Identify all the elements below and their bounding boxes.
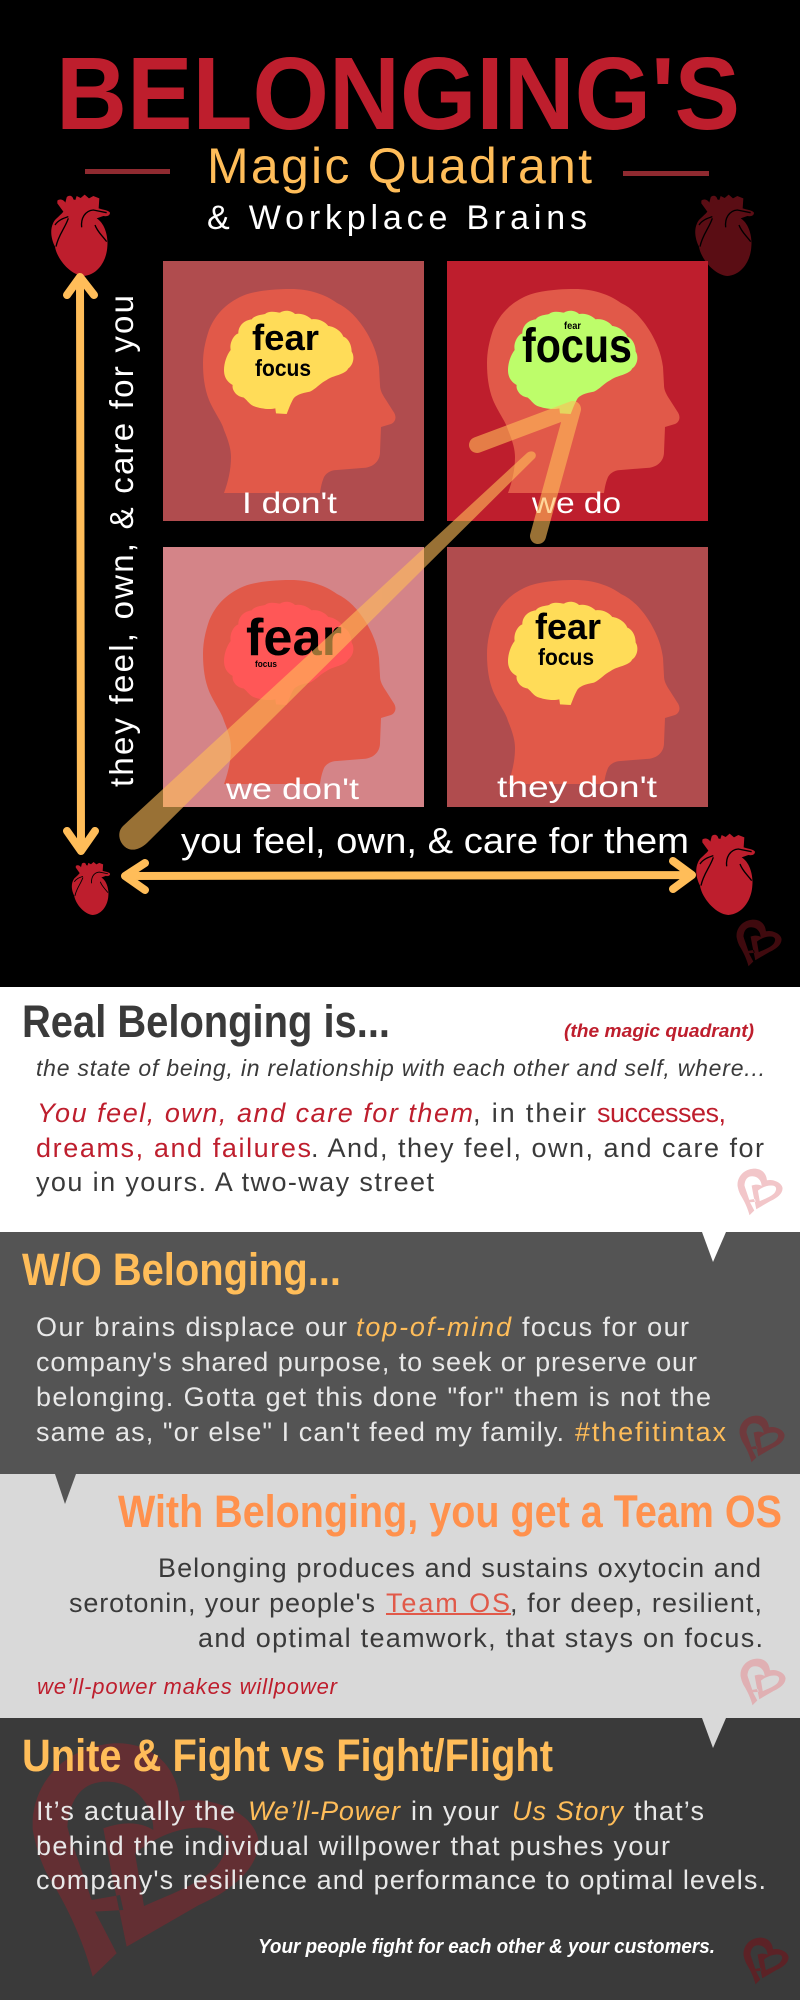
- panel: we do quadrant: [447, 261, 708, 521]
- panel: W/O Belonging: [0, 1232, 800, 1474]
- panel: we don't quadrant: [163, 547, 424, 807]
- body text: . And, they feel, own, and care for: [311, 1133, 764, 1163]
- pointer: [702, 1232, 726, 1262]
- closing line: Your people fight for each other & your customers.: [258, 1936, 715, 1958]
- body text: Us Story: [512, 1796, 624, 1826]
- icon: heart top right dark: [695, 195, 754, 276]
- panel: I don't quadrant: fear: [252, 317, 319, 358]
- arrow: horizontal axis: [125, 861, 692, 890]
- icon: logo: [740, 1416, 785, 1462]
- body text: company's shared purpose, to seek or preserve our: [36, 1347, 697, 1377]
- body text: in your: [411, 1796, 499, 1826]
- panel: black quadrant background: [0, 0, 800, 987]
- body text: and optimal teamwork, that stays on focus.: [198, 1623, 763, 1653]
- body text: belonging. Gotta get this done "for" them is not the: [36, 1382, 711, 1412]
- panel: they don't quadrant: [447, 547, 708, 807]
- icon: logo: [744, 1938, 789, 1984]
- icon: logo: [738, 1169, 783, 1215]
- title: BELONGING'S: [56, 36, 740, 151]
- body text: [36, 1796, 766, 1895]
- panel: Real Belonging is: [0, 987, 800, 1232]
- body text: Team OS: [386, 1588, 510, 1618]
- body text: dreams, and failures: [36, 1133, 311, 1163]
- body text: serotonin, your people's: [69, 1588, 375, 1618]
- panel: Unite & Fight: [0, 1718, 800, 2000]
- panel: they don't quadrant: they don't: [497, 771, 658, 804]
- panel: we do quadrant: we do: [531, 487, 621, 520]
- body text: #thefitintax: [575, 1417, 726, 1447]
- note: the magic quadrant: (the magic quadrant): [564, 1021, 754, 1041]
- body text: [36, 1098, 764, 1197]
- subtitle: Magic Quadrant with rules: Magic Quadrant: [207, 138, 592, 194]
- body text: focus for our: [522, 1312, 689, 1342]
- heading: Real Belonging is...: [22, 996, 390, 1047]
- body text: that’s: [634, 1796, 704, 1826]
- axis label: they feel, own, & care for you: they feel, own, & care for you: [103, 295, 140, 787]
- arrow: vertical axis: [67, 277, 95, 851]
- panel: With Belonging: [0, 1474, 800, 1718]
- panel: we do quadrant: fear: [564, 321, 581, 332]
- body text: , for deep, resilient,: [510, 1588, 762, 1618]
- icon: logo on black: [737, 920, 782, 966]
- heading: Unite & Fight vs Fight/Flight: [22, 1730, 553, 1781]
- body text: company's resilience and performance to optimal levels.: [36, 1865, 766, 1895]
- body text: [69, 1553, 763, 1653]
- body text: same as, "or else" I can't feed my family.: [36, 1417, 564, 1447]
- definition line: the state of being, in relationship with each other and self, where...: [36, 1055, 765, 1081]
- body text: behind the individual willpower that pushes your: [36, 1831, 670, 1861]
- panel: I don't quadrant: focus: [255, 355, 311, 381]
- arrow: diagonal to magic quadrant: [119, 409, 573, 850]
- body text: top-of-mind: [356, 1312, 512, 1342]
- body text: , in their: [473, 1098, 586, 1128]
- panel: we don't quadrant: focus: [255, 659, 277, 669]
- panel: we don't quadrant: we don't: [225, 773, 360, 806]
- icon: logo: [741, 1659, 786, 1705]
- body text: Our brains displace our: [36, 1312, 347, 1342]
- panel: I don't quadrant: [163, 261, 424, 521]
- icon: heart top left: [51, 195, 110, 276]
- body text: [36, 1312, 726, 1447]
- panel: I don't quadrant: I don't: [242, 487, 338, 520]
- body text: you in yours. A two-way street: [36, 1167, 434, 1197]
- icon: large logo watermark: [33, 1743, 258, 1977]
- body text: We’ll-Power: [248, 1796, 401, 1826]
- body text: You feel, own, and care for them: [37, 1098, 473, 1128]
- pointer: [55, 1474, 76, 1504]
- subtitle: & Workplace Brains: & Workplace Brains: [207, 199, 587, 237]
- panel: they don't quadrant: fear: [535, 606, 601, 647]
- panel: we do quadrant: focus: [522, 320, 632, 373]
- body text: It’s actually the: [36, 1796, 235, 1826]
- body text: successes,: [597, 1098, 726, 1128]
- body text: Belonging produces and sustains oxytocin and: [158, 1553, 761, 1583]
- heading: W/O Belonging...: [22, 1244, 341, 1295]
- panel: we don't quadrant: fear: [246, 609, 342, 667]
- panel: they don't quadrant: focus: [538, 644, 594, 670]
- axis label: you feel, own, & care for them: you feel, own, & care for them: [181, 820, 689, 861]
- subtitle: Magic Quadrant with rules: [85, 138, 709, 194]
- icon: heart bottom right: [696, 834, 755, 915]
- note: we'll-power: we’ll-power makes willpower: [37, 1674, 339, 1699]
- icon: heart bottom left small: [72, 862, 110, 915]
- pointer: [702, 1718, 726, 1748]
